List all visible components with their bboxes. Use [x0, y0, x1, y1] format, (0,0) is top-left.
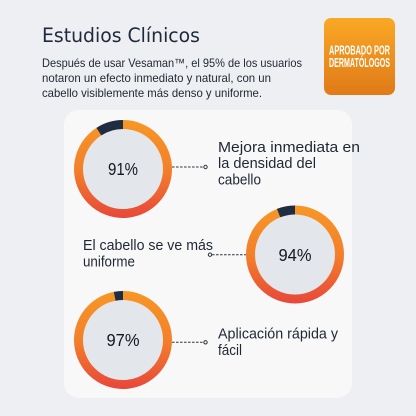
label: 97% — [218, 326, 339, 359]
badge: aprobado por dermatólogos — [324, 18, 395, 95]
label: 91%: la densidad del — [218, 156, 316, 172]
label: 91% — [218, 140, 360, 188]
label: 94% — [83, 238, 213, 270]
label: 97%: fácil — [218, 343, 242, 359]
connector: 97% — [172, 341, 207, 344]
label: 91%: cabello — [218, 172, 261, 188]
card background — [64, 110, 352, 398]
intro text — [42, 56, 302, 100]
donut: 94%: 94% — [278, 245, 312, 265]
intro text: Después de usar Vesaman™, el 95% de los usuarios — [42, 56, 302, 70]
donut: 97% — [78, 296, 168, 384]
connector: 94% — [208, 253, 246, 256]
connector: 91% — [172, 165, 207, 169]
label: 91%: Mejora inmediata en — [218, 140, 360, 156]
intro text: notaron un efecto inmediato y natural, con un — [42, 71, 271, 85]
intro text: cabello visiblemente más denso y uniforme. — [42, 86, 262, 100]
label: 94%: El cabello se ve más — [83, 238, 213, 254]
donut: 91%: 91% — [108, 159, 138, 179]
donut: 94% — [250, 210, 340, 299]
donut: 91% — [78, 124, 168, 214]
label: 97%: Aplicación rápida y — [218, 326, 339, 342]
panel: results — [64, 110, 360, 398]
donut: 97%: 97% — [106, 330, 140, 350]
label: 94%: uniforme — [83, 254, 135, 270]
title: Estudios Clínicos — [42, 24, 200, 47]
